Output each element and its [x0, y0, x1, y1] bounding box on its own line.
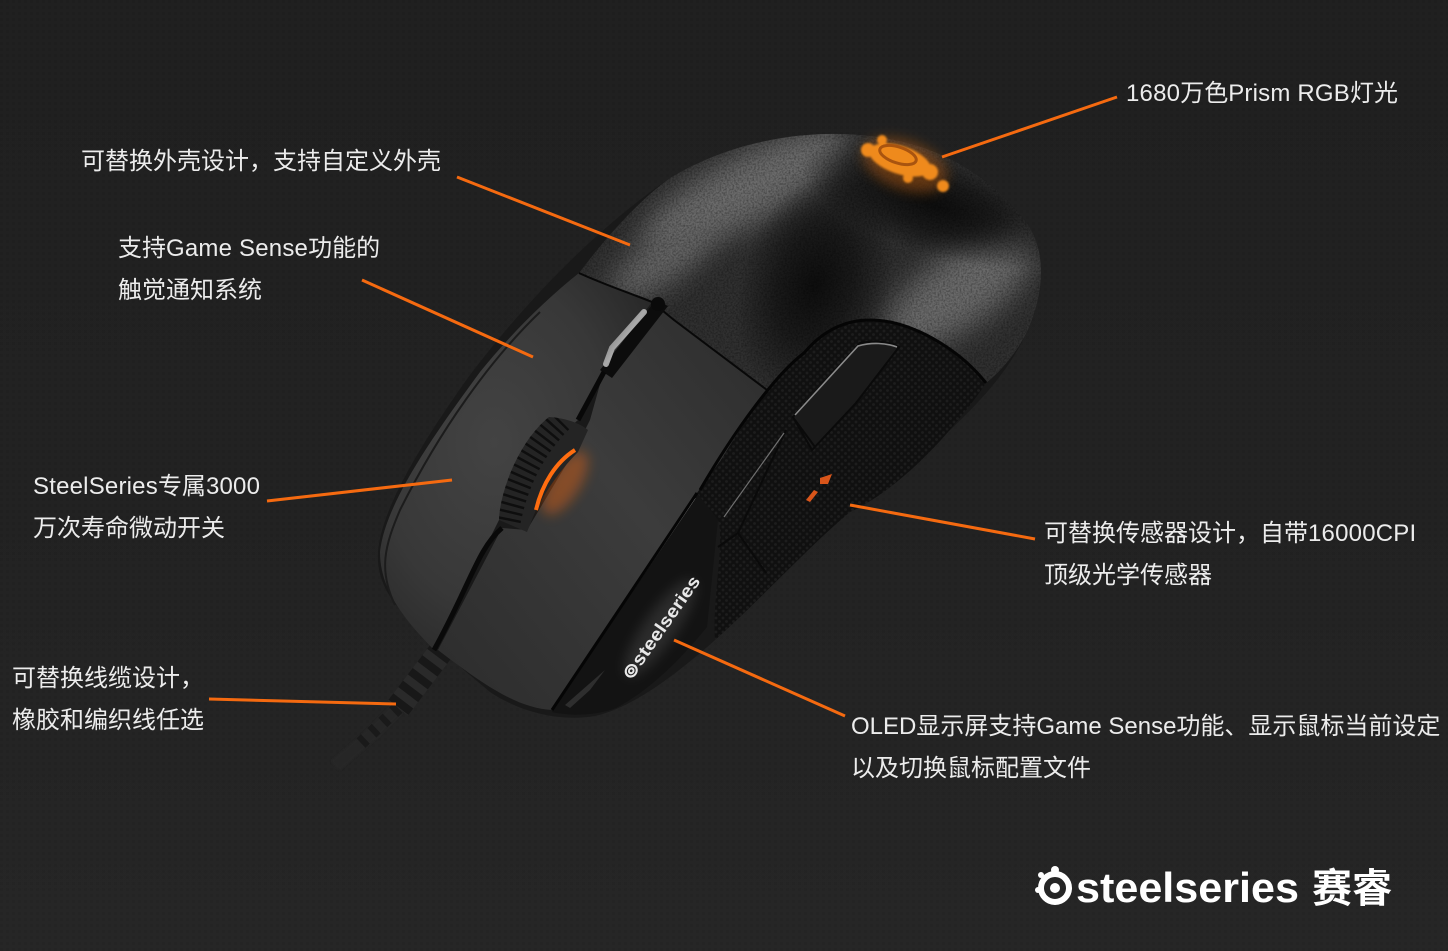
- mouse body: [378, 134, 1041, 718]
- text: OLED: OLED显示屏支持Game Sense功能、显示鼠标当前设定: [851, 713, 1440, 740]
- text: sensor: 顶级光学传感器: [1044, 562, 1212, 589]
- side button 2: [718, 420, 815, 573]
- icon: gear: [1035, 866, 1069, 902]
- left mouse button: [380, 273, 652, 650]
- line: RGB: [942, 97, 1117, 157]
- text: haptic notifications: 触觉通知系统: [118, 277, 262, 304]
- text: OLED: 以及切换鼠标配置文件: [851, 755, 1091, 782]
- wheel glow: [533, 445, 597, 521]
- cable: [335, 650, 442, 766]
- split lines: [579, 273, 767, 390]
- slit below wheel: [434, 528, 502, 650]
- mouse illustration: [357, 132, 1041, 748]
- text: cable: 橡胶和编织线任选: [12, 707, 204, 734]
- chinese brand name: 赛睿: [1312, 867, 1392, 911]
- line: haptic: [362, 280, 533, 357]
- top shell: [580, 134, 1041, 388]
- right mouse button: [438, 304, 767, 710]
- text: replaceable shell: 可替换外壳设计，支持自定义外壳: [81, 148, 441, 175]
- orange side dots: [806, 474, 832, 502]
- text: switches: SteelSeries专属3000: [33, 473, 260, 500]
- line: cable: [209, 699, 396, 704]
- text: haptic notifications: 支持Game Sense功能的: [118, 235, 380, 262]
- OLED panel: [552, 493, 718, 715]
- text: haptic notifications: [118, 235, 380, 304]
- scroll wheel: [499, 417, 597, 532]
- left edge groove: [385, 312, 540, 605]
- text: OLED: [851, 713, 1440, 782]
- brand text on mouse: ⊚steelseries: [618, 572, 704, 683]
- line: sensor: [850, 505, 1035, 539]
- side panel: [697, 320, 986, 640]
- line: shell: [457, 177, 630, 245]
- text: sensor: [1044, 520, 1416, 589]
- text: RGB lighting: 1680万色Prism RGB灯光: [1126, 80, 1398, 107]
- side button 1: [793, 342, 899, 450]
- text: switches: 万次寿命微动开关: [33, 515, 225, 542]
- slit: [578, 372, 604, 420]
- line: OLED: [674, 640, 845, 716]
- wordmark: steelseries: [1076, 864, 1299, 911]
- text: cable: 可替换线缆设计，: [12, 665, 204, 692]
- brand logo: [1035, 864, 1392, 911]
- glowing logo: [855, 127, 955, 203]
- line: switches: [267, 480, 452, 501]
- text: cable: [12, 665, 204, 734]
- callout lines: [209, 97, 1117, 716]
- scroll top button: [600, 297, 668, 378]
- text: sensor: 可替换传感器设计，自带16000CPI: [1044, 520, 1416, 547]
- text: switches: [33, 473, 260, 542]
